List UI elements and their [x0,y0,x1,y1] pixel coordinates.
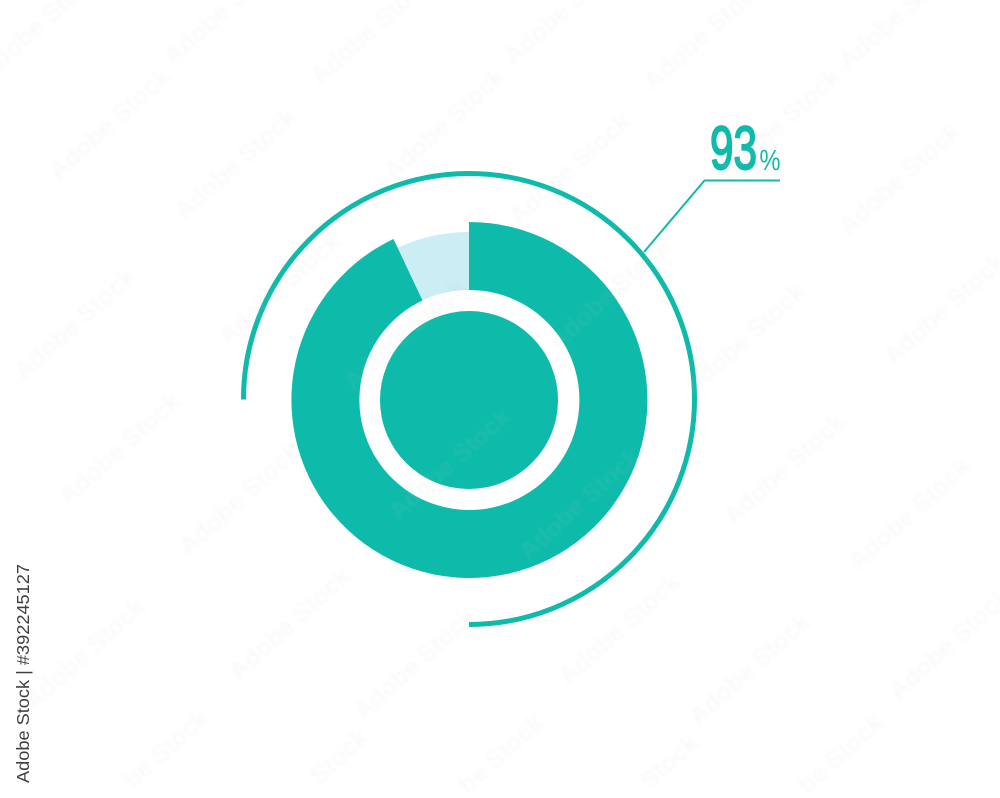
stock watermarks: Adobe Stock [684,607,816,731]
stock watermarks: Adobe Stock [554,567,686,691]
stock watermarks: Adobe Stock [174,437,306,561]
stock watermarks: Adobe Stock [504,107,636,231]
stock watermarks: Adobe Stock [514,442,646,566]
percent sign: % [760,145,780,177]
stock watermarks: be Stock [793,709,889,798]
stock watermarks: Adobe Stock [834,117,966,241]
stock id caption, vertical: Adobe Stock | #392245127 [13,564,33,783]
stock watermarks: Adobe Stock [339,272,471,396]
stock watermarks: Adobe Stock [44,62,176,186]
stock watermarks: Adobe Stock [544,232,676,356]
stock watermarks: Stock [635,729,704,795]
stock watermarks: Adobe Stock [679,277,811,401]
remaining 7 percent wedge [398,232,469,300]
stock watermarks: Adobe Stock [719,407,851,531]
stock watermarks: Adobe Stock [19,592,151,716]
center disc [380,311,558,489]
93 percent segment [291,222,647,578]
stock watermarks: be Stock [118,704,214,794]
value label: 93% [710,114,780,182]
stock watermarks: Adobe Stock [384,402,516,526]
leader line to value label [644,180,780,252]
stock watermarks: Adobe Stock [224,562,356,686]
stock watermarks: Adobe Stock [170,102,302,226]
stock watermarks: Adobe Stock [54,387,186,511]
stock watermarks: Adobe Stock [349,602,481,726]
outer arc: three-quarter progress ring [243,173,694,624]
stock watermarks: Adobe Stock [714,62,846,186]
stock watermarks: Adobe Stock [379,62,511,186]
stock watermarks: be Stock [453,709,549,798]
donut chart [291,222,647,578]
value number: 93 [710,114,757,182]
stock watermarks: Adobe Stock [844,452,976,576]
stock watermarks: Adobe Stock [9,262,141,386]
stock watermarks: Stock [305,724,374,790]
stock watermarks: Adobe Stock [214,227,346,351]
